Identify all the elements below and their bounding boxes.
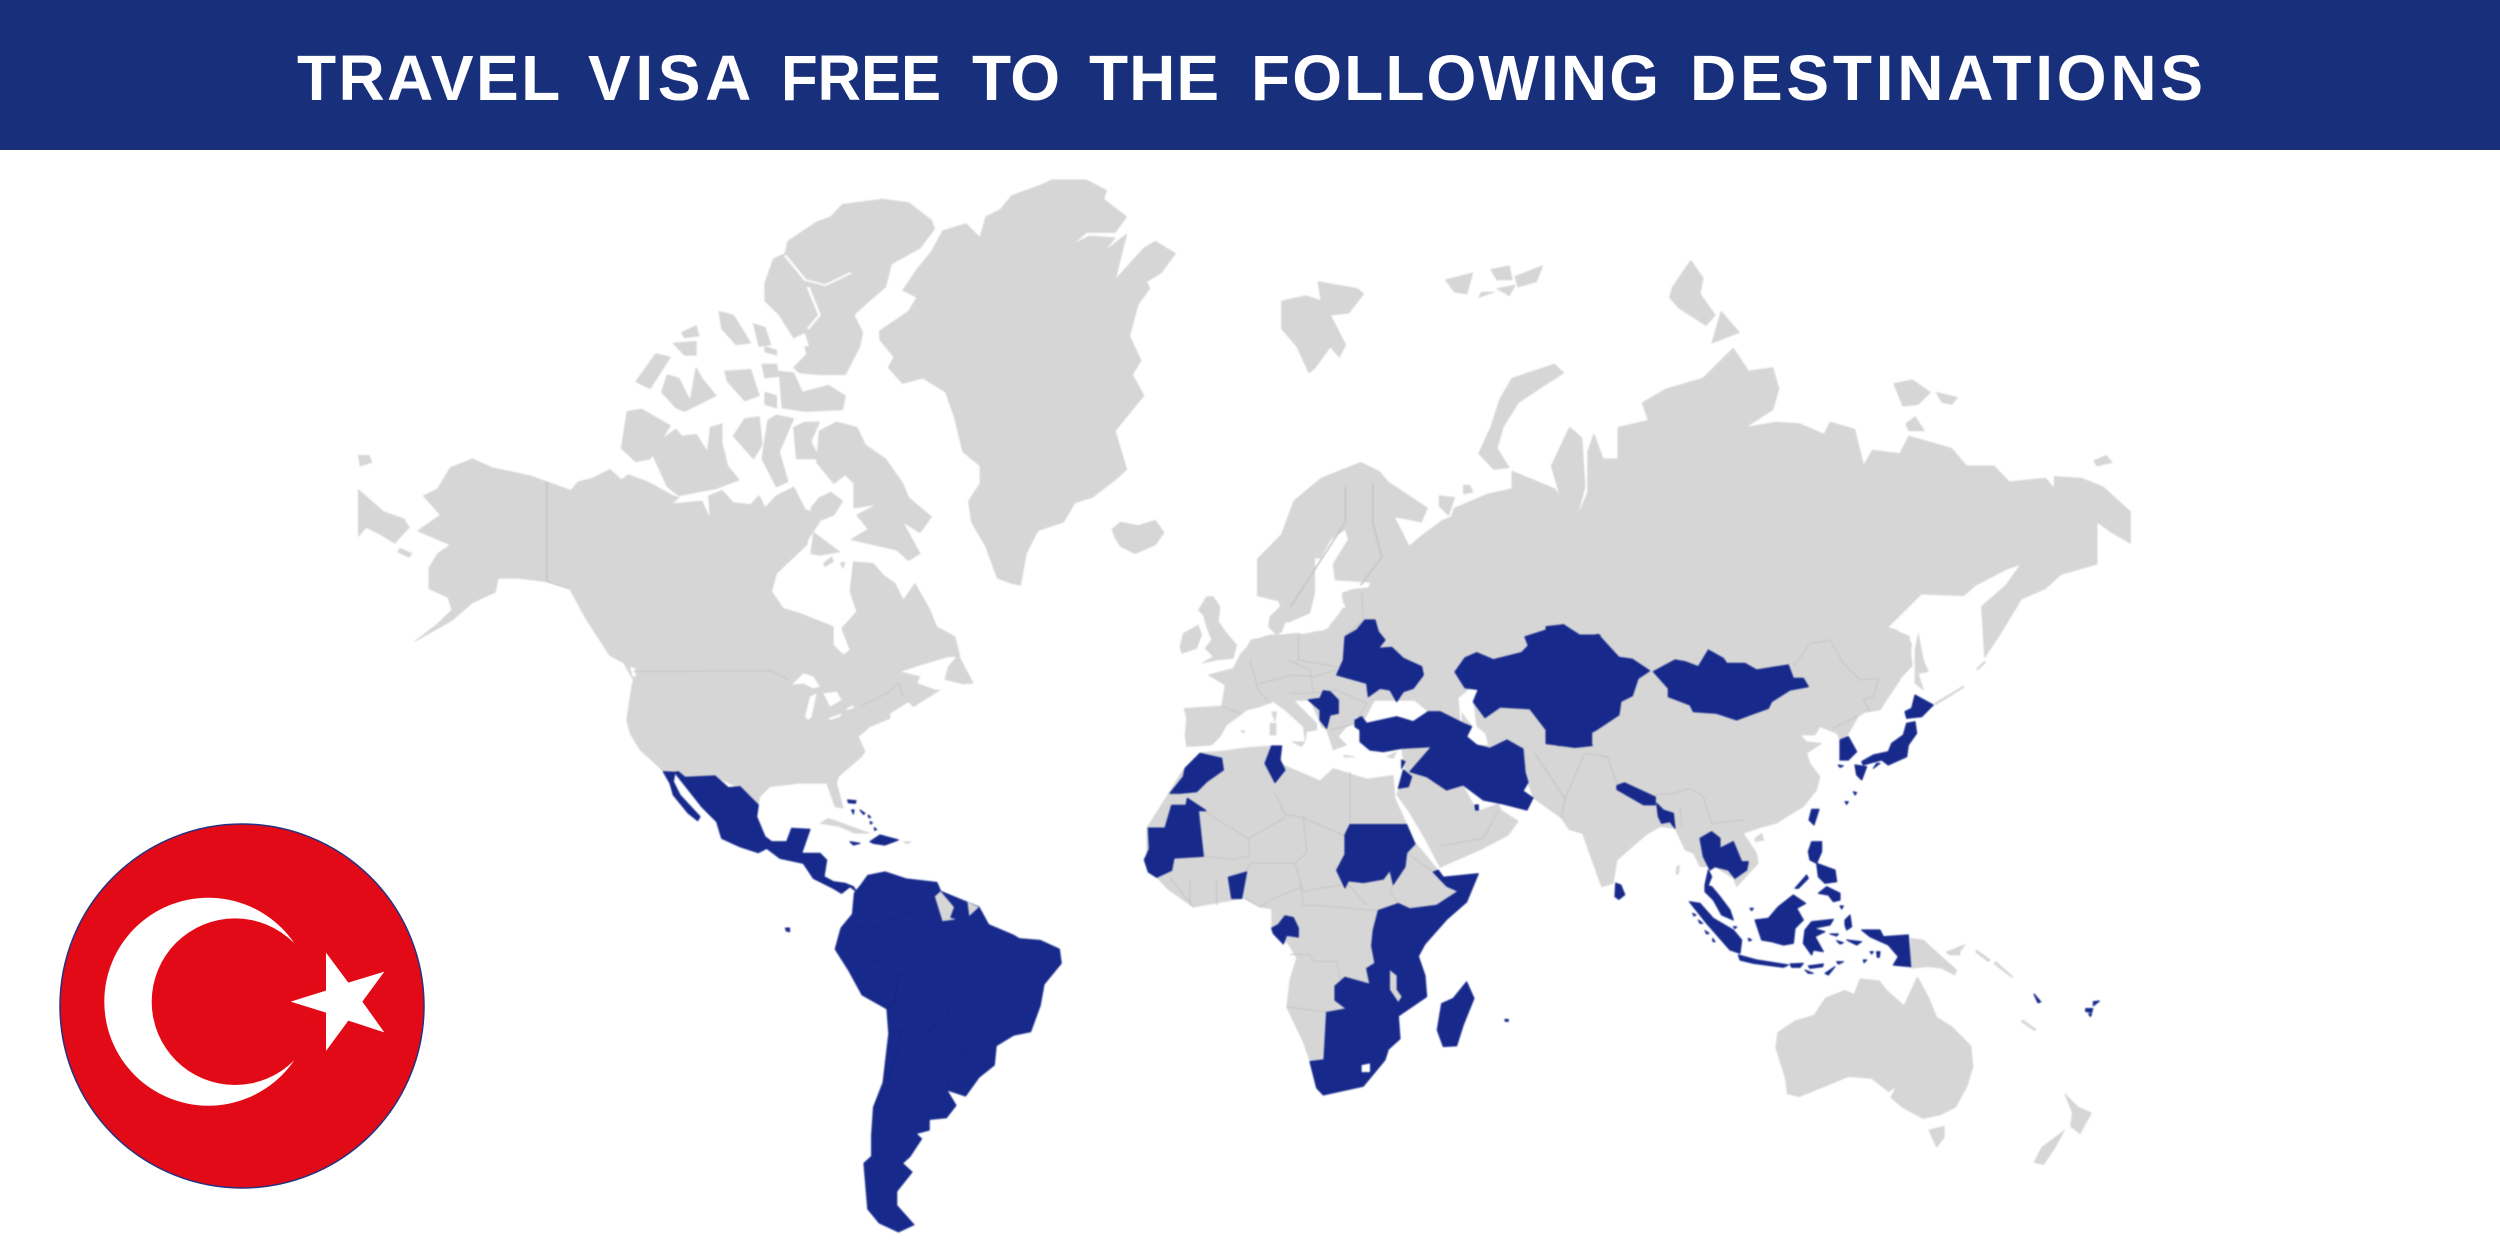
title: DESTINATIONS bbox=[1690, 42, 2203, 114]
flag: Turkey circular badge bbox=[59, 823, 425, 1189]
Africa: Lake Malawi and Lesotho bbox=[1362, 970, 1402, 1072]
visa-free countries: Mexico, Central America and Caribbean bbox=[663, 772, 898, 893]
title: FOLLOWING bbox=[1251, 42, 1659, 114]
title: VISA bbox=[588, 42, 750, 114]
internal borders inside visa-free regions bbox=[853, 907, 967, 1107]
title: THE bbox=[1089, 42, 1219, 114]
visa-free countries: Africa and Kazakhstan bbox=[1144, 625, 1600, 1095]
visa-free countries: Central Asia, South Asia and Pacific islands bbox=[1546, 625, 2099, 1016]
land: Russia and northern Eurasia bbox=[1236, 261, 2130, 700]
Guyana and French Guiana (not visa free) bbox=[935, 891, 979, 921]
land: Central and South Asia, Australia and Oceania bbox=[1462, 562, 2092, 1164]
visa-free countries: South America bbox=[786, 872, 1061, 1232]
crescent bbox=[104, 898, 318, 1106]
land: mainland Canada, United States and Caribbean bbox=[610, 517, 973, 844]
title: FREE bbox=[781, 42, 941, 114]
flag disc bbox=[60, 824, 424, 1188]
title: TO bbox=[972, 42, 1060, 114]
header banner with title bbox=[0, 0, 2500, 150]
national borders bbox=[547, 482, 1878, 1012]
visa-free countries: Eastern Europe, Turkey, Iran and Levant bbox=[1170, 620, 1533, 810]
title: TRAVEL bbox=[297, 42, 559, 114]
visa-free countries: Mongolia, Japan, South Korea, Taiwan, Thailand, Philippines bbox=[1653, 650, 1933, 902]
land: Alaska, Canadian Arctic and Greenland bbox=[359, 180, 1175, 712]
land: China, Korea and Southeast Asia bbox=[1640, 597, 1960, 975]
land: Europe and British Isles bbox=[1180, 593, 1470, 758]
water: Great Lakes and Arctic channels bbox=[630, 255, 1488, 745]
visa-free countries: Malaysia and Indonesia bbox=[1689, 870, 1911, 975]
land: Africa and Arabia bbox=[1147, 746, 1518, 1095]
star bbox=[291, 953, 384, 1051]
